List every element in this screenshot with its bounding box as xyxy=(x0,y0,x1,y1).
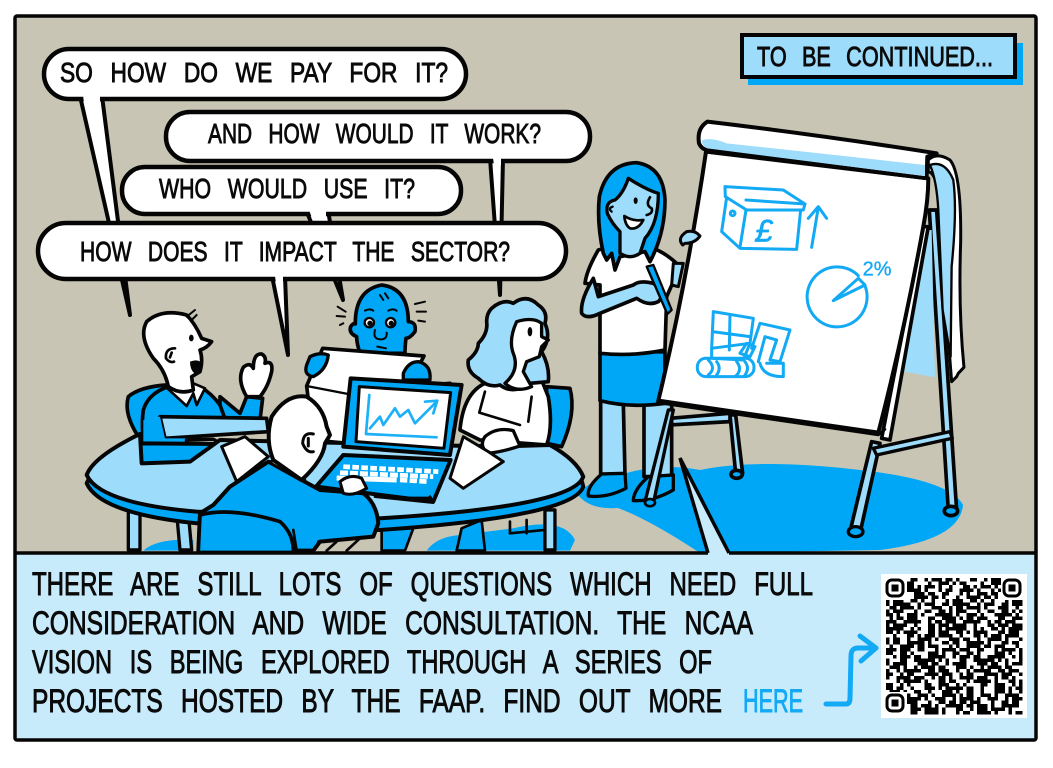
collar xyxy=(268,460,305,480)
document held xyxy=(307,348,450,443)
roll xyxy=(699,122,937,178)
head xyxy=(144,313,212,392)
chair back xyxy=(198,512,293,551)
back easel legs and crossbar xyxy=(670,210,958,516)
caption panel: CONSIDERATION AND WIDE CONSULTATION. THE NCAA xyxy=(32,605,754,641)
to be continued label xyxy=(742,35,1023,85)
icon: box with pound sign xyxy=(697,187,867,377)
shirt xyxy=(585,247,680,354)
torso xyxy=(460,380,550,445)
speech bubble: and how would it work xyxy=(166,112,590,295)
pound sign: £ xyxy=(754,213,774,249)
left front leg xyxy=(645,410,673,503)
icon: pie chart xyxy=(807,267,867,327)
arrow to QR code xyxy=(826,636,876,704)
marker xyxy=(647,265,672,314)
hair xyxy=(599,163,665,270)
hanging pages xyxy=(928,156,964,382)
table xyxy=(87,443,583,530)
front easel leg xyxy=(882,227,928,440)
speech bubble: so how do we pay for it xyxy=(44,49,466,315)
arm xyxy=(581,278,662,317)
QR code xyxy=(881,574,1027,718)
speech bubble: who would use it: WHO WOULD USE IT? xyxy=(159,173,415,204)
legs under table xyxy=(382,520,485,551)
torso xyxy=(142,387,227,464)
woman on right xyxy=(460,299,550,445)
hair xyxy=(468,299,549,390)
chair left xyxy=(127,385,167,440)
presenter hand xyxy=(680,231,700,245)
flip chart front xyxy=(645,122,952,537)
icon: digger xyxy=(712,312,753,350)
collar xyxy=(167,383,205,406)
caption panel: VISION IS BEING EXPLORED THROUGH A SERIES OF xyxy=(32,644,712,680)
keyboard xyxy=(343,467,438,472)
face xyxy=(505,320,548,389)
caption panel xyxy=(15,458,1036,740)
body xyxy=(198,462,378,551)
face xyxy=(607,178,658,257)
head xyxy=(269,396,330,480)
caption panel: HERE xyxy=(743,683,803,719)
floor shadows xyxy=(143,524,575,551)
raised arm xyxy=(220,397,263,427)
to be continued label: TO BE CONTINUED... xyxy=(757,41,993,72)
left paper xyxy=(222,437,268,482)
man at back xyxy=(306,285,450,443)
speech bubble: so how do we pay for it: SO HOW DO WE PAY FOR IT? xyxy=(60,57,448,88)
man on left xyxy=(142,310,272,464)
caption text: THERE ARE STILL LOTS OF QUESTIONS WHICH NEED FULL xyxy=(32,566,813,602)
QR finder squares xyxy=(884,577,1024,715)
legs xyxy=(601,400,672,477)
woman's hand over table xyxy=(482,430,520,453)
speech bubble: who would use it xyxy=(122,167,461,300)
speech bubble: how does it impact the sector: HOW DOES IT IMPACT THE SECTOR? xyxy=(80,236,510,267)
caption panel: PROJECTS HOSTED BY THE FAAP. FIND OUT MORE xyxy=(32,683,722,719)
face details xyxy=(365,318,374,327)
raised hand xyxy=(241,354,272,397)
forearm xyxy=(160,417,268,438)
panel pointer xyxy=(680,458,729,553)
paper xyxy=(658,152,928,433)
hands xyxy=(306,354,328,377)
chart on screen xyxy=(366,395,437,437)
chair right xyxy=(547,387,572,447)
laptop xyxy=(316,378,462,503)
other arm xyxy=(672,263,683,287)
flip chart easel xyxy=(670,156,964,516)
shoes xyxy=(588,473,673,501)
speech bubble: how does it impact the sector xyxy=(38,223,566,355)
man in foreground xyxy=(198,396,378,551)
worry lines xyxy=(337,302,426,325)
icon: up arrow xyxy=(808,207,827,247)
percentage label: 2% xyxy=(863,259,892,281)
rear sheet xyxy=(904,230,935,377)
right paper xyxy=(450,437,503,488)
head xyxy=(350,285,415,353)
speech bubble: and how would it work: AND HOW WOULD IT WORK? xyxy=(208,118,541,149)
chair base xyxy=(510,520,545,533)
skirt xyxy=(600,352,665,405)
lower hand xyxy=(187,439,224,461)
hand on keys xyxy=(340,476,367,494)
floor shadow under easel xyxy=(578,464,963,553)
presenter woman xyxy=(581,163,683,501)
table legs xyxy=(128,510,555,550)
meeting table group xyxy=(87,285,583,551)
